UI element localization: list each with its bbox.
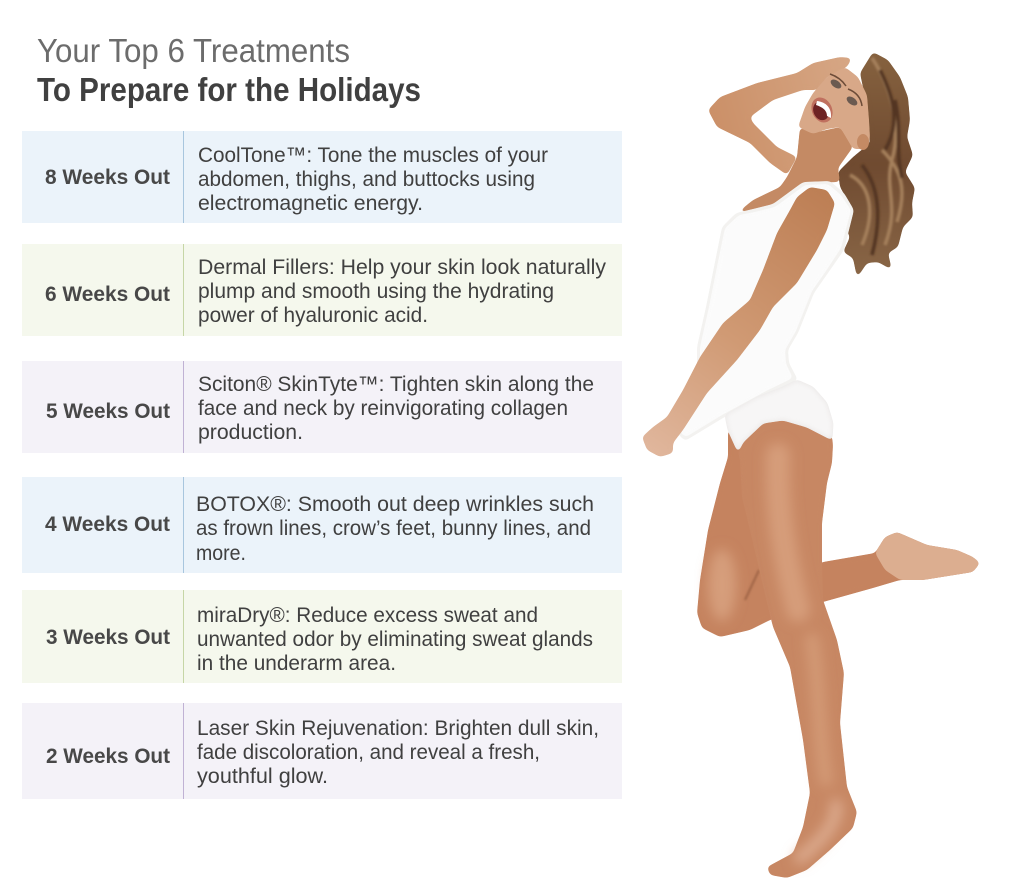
bent back leg [697,430,980,637]
eyebrow and eye: lower [845,89,862,107]
standing front leg [738,420,857,878]
illustration: woman in white tank top and briefs [642,52,980,878]
description: Sciton SkinTyte [198,373,594,444]
description: Sciton SkinTyte: production. [198,421,303,444]
thigh highlight and knee crease [708,549,759,621]
description: BOTOX [196,493,594,565]
neck and chest [737,127,853,213]
label: 6 weeks out: 6 Weeks Out [45,283,170,306]
raised arm [708,57,852,175]
description: Laser Skin Rejuvenation: fade discoloration, and reveal a fresh, [197,741,540,764]
description: miraDry: unwanted odor by eliminating sweat glands [197,628,593,651]
description: miraDry [197,604,593,675]
tank top inner white [680,184,851,437]
description: CoolTone: CoolTone™: Tone the muscles of your [198,144,548,167]
panel: 4 weeks out [22,477,622,573]
teeth [816,101,831,118]
description: Sciton SkinTyte: face and neck by reinvigorating collagen [198,397,568,420]
white tank top [677,181,854,441]
title [37,32,421,108]
front arm and fist [642,187,835,457]
panel: 3 weeks out [22,590,622,683]
description: miraDry: in the underarm area. [197,652,396,675]
panel: 6 weeks out [22,244,622,336]
white briefs [725,380,833,452]
description: Sciton SkinTyte: Sciton® SkinTyte™: Tighten skin along the [198,373,594,396]
mouth [807,94,837,126]
label: 8 weeks out: 8 Weeks Out [45,166,170,189]
mouth interior [810,99,832,123]
hair [838,52,915,278]
eyebrow and eye: upper [829,74,846,90]
panel: 2 weeks out [22,703,622,799]
description: Dermal Fillers: Dermal Fillers: Help your skin look naturally [198,256,606,279]
description: CoolTone: abdomen, thighs, and buttocks using [198,168,535,191]
description: Laser Skin Rejuvenation: youthful glow. [197,765,328,788]
panel: 8 weeks out [22,131,622,223]
title line: light: Your Top 6 Treatments [37,32,350,69]
ear [857,134,869,150]
description: Dermal Fillers [198,256,606,327]
panel: 5 weeks out [22,361,622,453]
description: CoolTone: electromagnetic energy. [198,192,423,215]
description: Dermal Fillers: power of hyaluronic acid. [198,304,428,327]
description: Laser Skin Rejuvenation [197,717,599,788]
description: BOTOX: more. [196,542,246,565]
description: miraDry: miraDry®: Reduce excess sweat and [197,604,538,627]
standing leg highlights [778,455,836,858]
description: BOTOX: BOTOX®: Smooth out deep wrinkles such [196,493,594,516]
description: BOTOX: as frown lines, crow’s feet, bunny lines, and [196,517,591,540]
title line: bold: To Prepare for the Holidays [37,71,421,108]
description: CoolTone [198,144,548,215]
label: 3 weeks out: 3 Weeks Out [46,626,170,649]
description: Dermal Fillers: plump and smooth using the hydrating [198,280,554,303]
sole of lifted foot [875,532,980,580]
face [798,67,870,150]
description: Laser Skin Rejuvenation: Laser Skin Rejuvenation: Brighten dull skin, [197,717,599,740]
label: 5 weeks out: 5 Weeks Out [46,400,170,423]
label: 4 weeks out: 4 Weeks Out [45,513,170,536]
label: 2 weeks out: 2 Weeks Out [46,745,170,768]
